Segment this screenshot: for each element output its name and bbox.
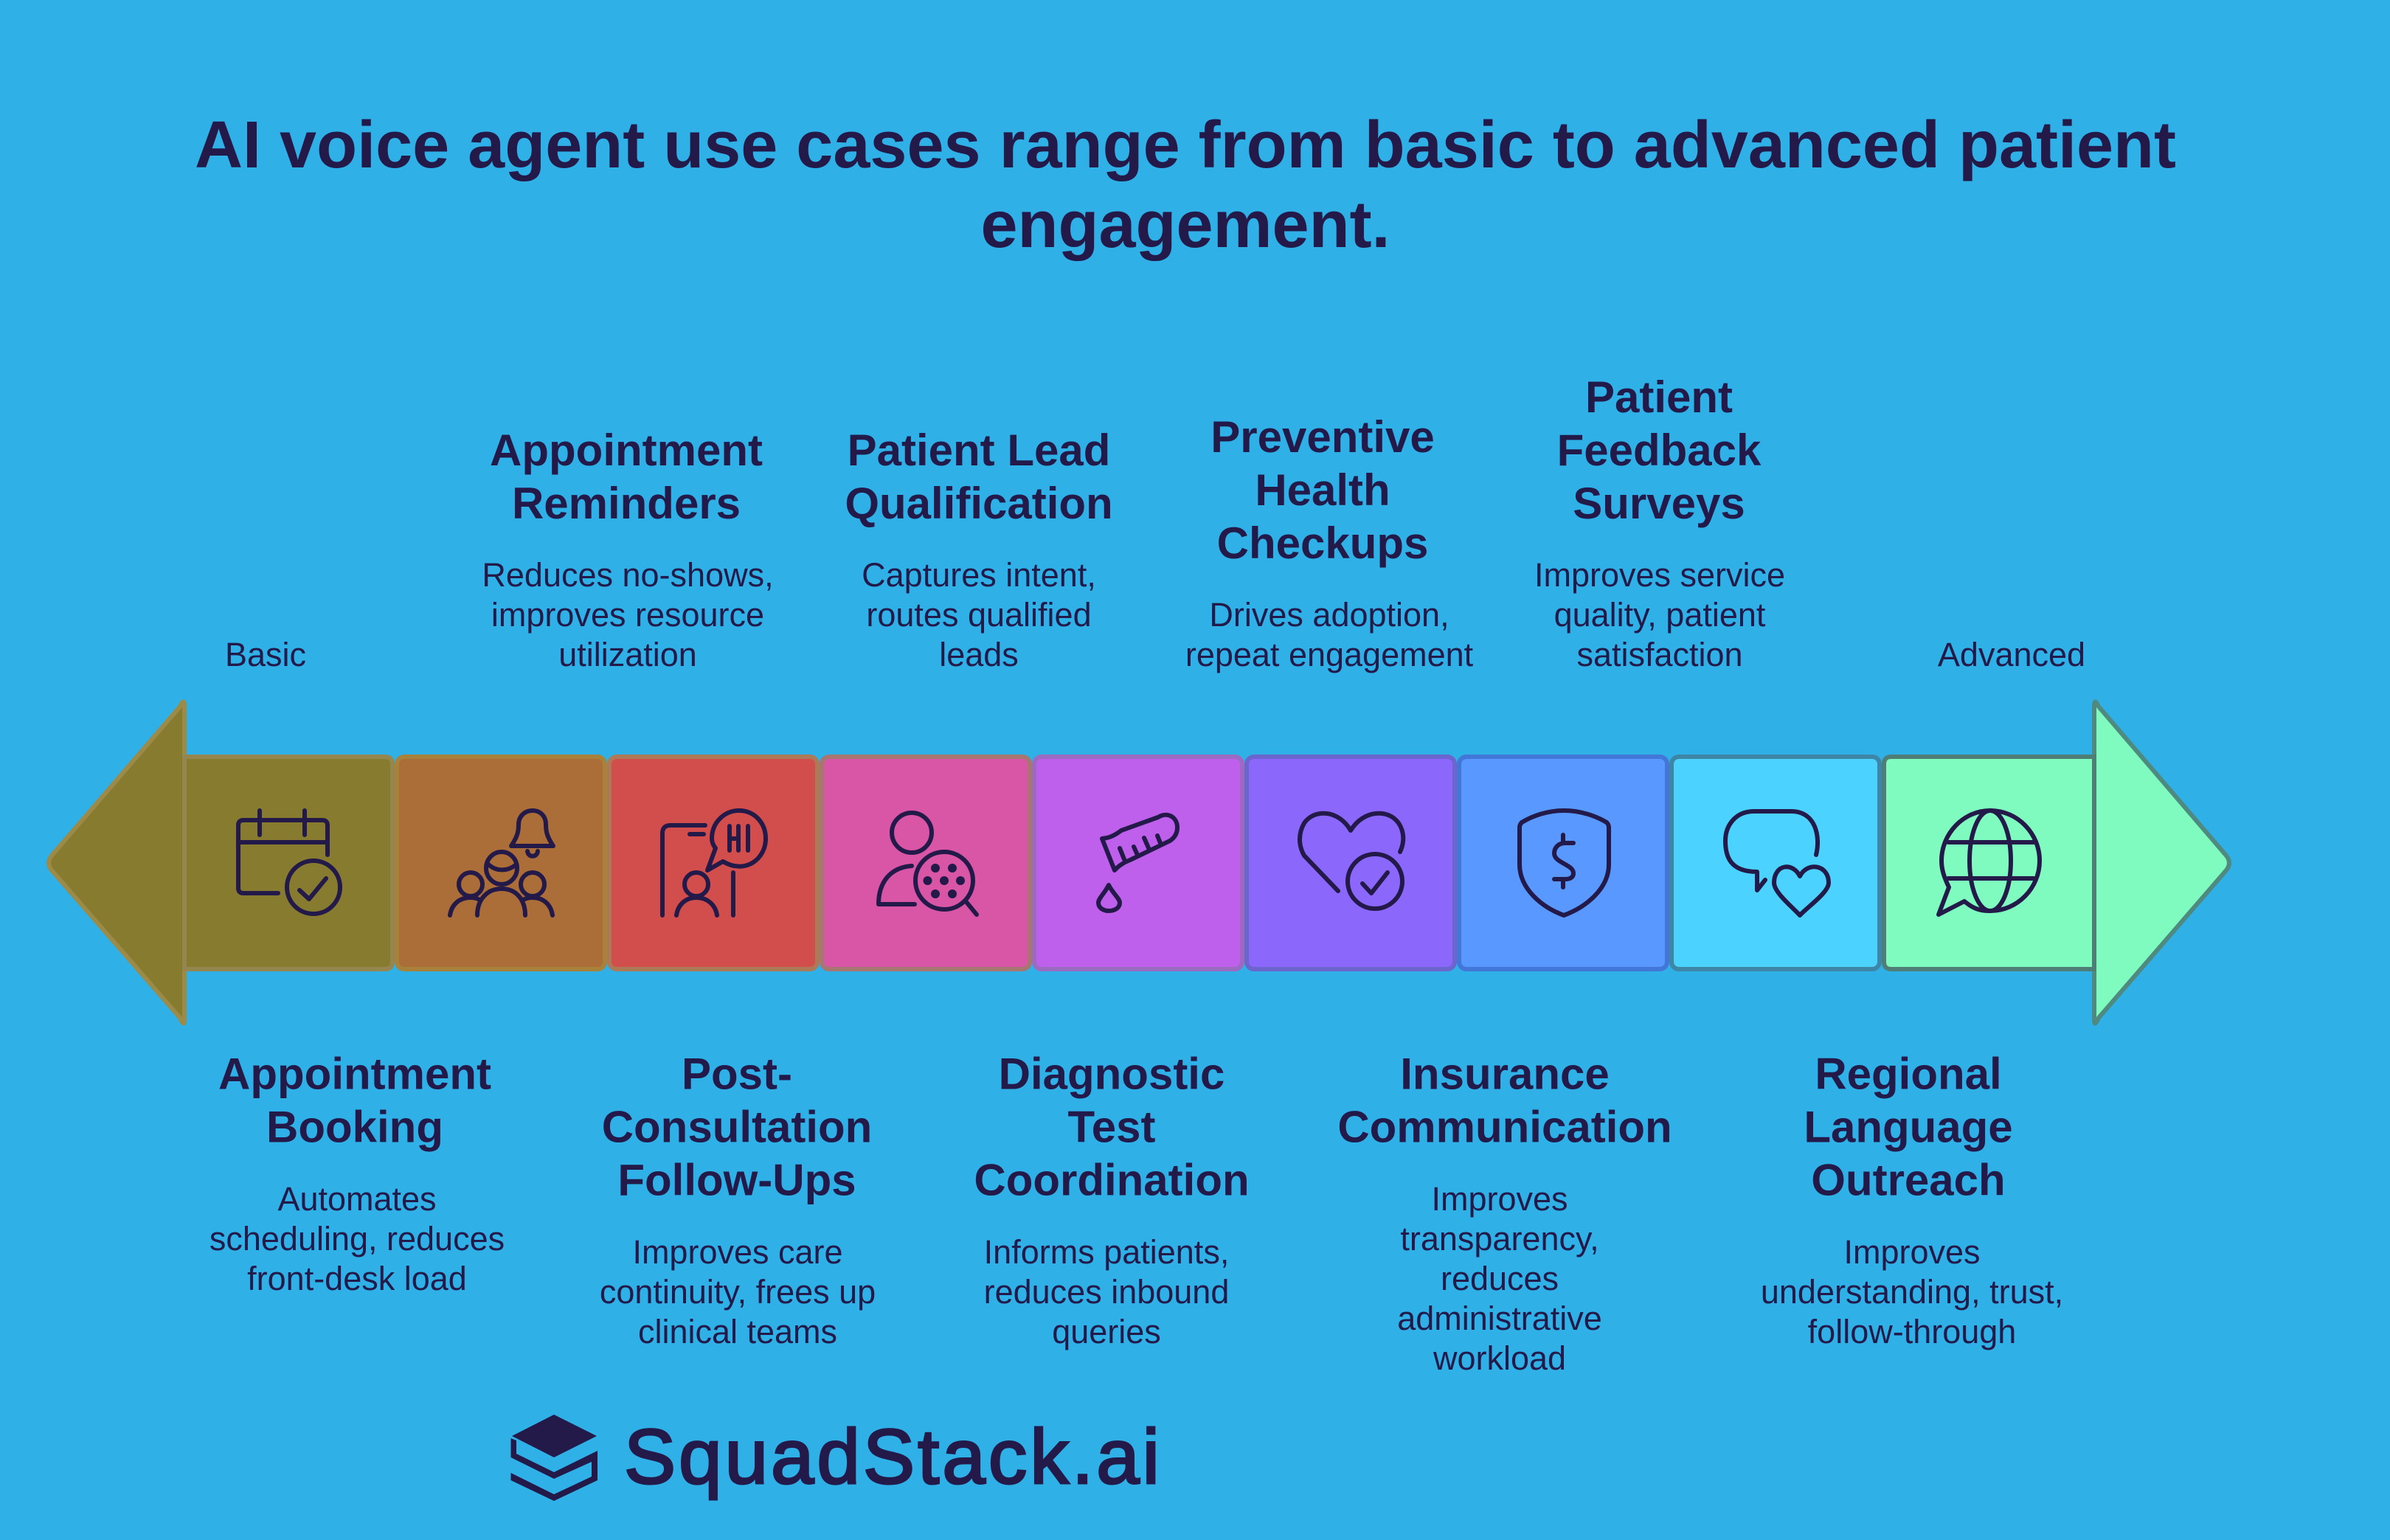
description: Drives adoption, <box>1209 596 1449 634</box>
description: Improves care <box>632 1233 843 1271</box>
heading: Test <box>1068 1102 1155 1152</box>
heading: Patient Lead <box>848 426 1110 475</box>
heading: Reminders <box>512 479 741 528</box>
segment 9 <box>1884 757 2094 969</box>
icon: globe speech bubble <box>1939 811 2040 915</box>
panel: Diagnostic Test Coordination <box>974 1049 1250 1350</box>
description: Improves service <box>1534 556 1785 594</box>
heading: Patient <box>1585 372 1733 422</box>
label: Advanced: Advanced <box>1938 636 2085 673</box>
title: AI voice agent use cases range from basic to advanced patient <box>195 108 2176 182</box>
icon: speech bubble with heart <box>1725 811 1829 915</box>
description: continuity, frees up <box>600 1273 876 1311</box>
heading: Feedback <box>1557 426 1762 475</box>
description: utilization <box>558 636 697 673</box>
arrow head: right <box>2094 702 2229 1024</box>
panel: Appointment Reminders <box>482 426 774 673</box>
description: improves resource <box>491 596 764 634</box>
description: administrative <box>1397 1300 1602 1337</box>
heading: Surveys <box>1573 479 1745 528</box>
logo: SquadStack.ai <box>510 1414 1160 1501</box>
heading: Post- <box>682 1049 792 1099</box>
heading: Preventive <box>1210 412 1435 462</box>
segment 7 <box>1459 757 1667 969</box>
description: transparency, <box>1400 1220 1599 1258</box>
description: satisfaction <box>1576 636 1743 673</box>
panel: Appointment Booking <box>209 1049 505 1297</box>
description: workload <box>1433 1339 1566 1377</box>
arrow head: left <box>49 702 184 1024</box>
heading: Booking <box>266 1102 443 1152</box>
description: Reduces no-shows, <box>482 556 774 594</box>
icon: person with magnifier <box>879 813 977 915</box>
heading: Appointment <box>218 1049 491 1099</box>
description: understanding, trust, <box>1761 1273 2063 1311</box>
panel: Regional Language Outreach <box>1761 1049 2063 1350</box>
panel: Post-Consultation Follow-Ups <box>600 1049 876 1350</box>
description: quality, patient <box>1554 596 1766 634</box>
heading: Outreach <box>1811 1155 2006 1205</box>
segment 5 <box>1034 757 1242 969</box>
heading: Appointment <box>490 426 763 475</box>
description: reduces <box>1441 1260 1559 1297</box>
icon: phone with HI speech bubble <box>662 811 766 915</box>
heading: Language <box>1804 1102 2013 1152</box>
description: Improves <box>1431 1180 1568 1218</box>
description: Automates <box>277 1180 437 1218</box>
icon: heart with check <box>1300 814 1403 909</box>
panel: Insurance Communication <box>1337 1049 1672 1377</box>
heading: Consultation <box>602 1102 872 1152</box>
description: scheduling, reduces <box>209 1220 505 1258</box>
segment 4 <box>822 757 1030 969</box>
description: Improves <box>1843 1233 1981 1271</box>
heading: Coordination <box>974 1155 1250 1205</box>
heading: Follow-Ups <box>617 1155 856 1205</box>
segment 8 <box>1672 757 1880 969</box>
description: queries <box>1052 1313 1161 1350</box>
description: Informs patients, <box>984 1233 1229 1271</box>
segment 3 <box>609 757 817 969</box>
panel: Patient Lead Qualification <box>845 426 1113 673</box>
panel: Preventive Health Checkups <box>1185 412 1474 673</box>
icon: test tube with drop <box>1098 815 1177 911</box>
heading: Diagnostic <box>999 1049 1225 1099</box>
heading: Insurance <box>1400 1049 1610 1099</box>
title: engagement. <box>980 188 1390 262</box>
heading: Health <box>1255 465 1390 515</box>
description: leads <box>939 636 1019 673</box>
description: front-desk load <box>247 1260 467 1297</box>
segment 1 <box>184 757 392 969</box>
segment 2 <box>397 757 605 969</box>
heading: Communication <box>1337 1102 1672 1152</box>
description: follow-through <box>1808 1313 2016 1350</box>
icon: stacked layers <box>510 1415 598 1501</box>
description: Captures intent, <box>862 556 1096 594</box>
label: Basic: Basic <box>225 636 306 673</box>
description: clinical teams <box>638 1313 837 1350</box>
segment 6 <box>1247 757 1455 969</box>
icon: calendar with check <box>238 811 340 914</box>
description: repeat engagement <box>1185 636 1474 673</box>
icon: shield with dollar <box>1520 811 1609 915</box>
heading: Qualification <box>845 479 1113 528</box>
wordmark: SquadStack.ai <box>624 1414 1160 1500</box>
description: reduces inbound <box>984 1273 1229 1311</box>
heading: Checkups <box>1217 518 1428 568</box>
icon: group with bell <box>450 811 553 915</box>
heading: Regional <box>1815 1049 2002 1099</box>
description: routes qualified <box>866 596 1092 634</box>
panel: Patient Feedback Surveys <box>1534 372 1785 673</box>
